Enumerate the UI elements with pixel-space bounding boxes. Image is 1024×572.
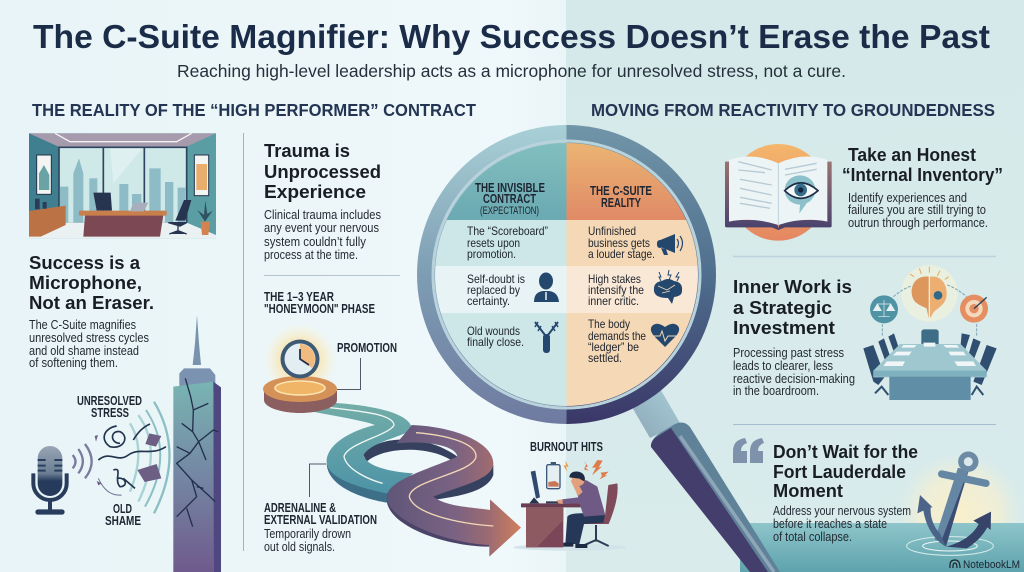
label: old shame: SHAME xyxy=(105,514,141,528)
text: processing past stress: reactive decision-making xyxy=(733,371,855,386)
heading: trauma is unprocessed experience xyxy=(264,140,381,202)
text: c-suite magnifies: of softening them. xyxy=(29,355,118,370)
column head: c-suite reality: REALITY xyxy=(601,196,641,210)
column head: c-suite reality xyxy=(590,184,652,210)
text: temporarily drown: Temporarily drown xyxy=(264,526,351,541)
row text: high stakes xyxy=(588,272,644,308)
logo: notebooklm: NotebookLM xyxy=(963,559,1020,571)
icon: brain with lightning xyxy=(654,270,682,304)
title: The C-Suite Magnifier: Why Success Doesn’t Erase the Past xyxy=(33,19,990,56)
text: c-suite magnifies: The C-Suite magnifies xyxy=(29,317,136,332)
row text: scoreboard xyxy=(467,224,548,261)
table panels in lens xyxy=(435,140,698,409)
row text: high stakes: intensify the xyxy=(588,283,644,297)
handle of magnifier xyxy=(625,380,780,572)
icon: heart with pulse xyxy=(650,324,680,347)
row text: the body: demands the xyxy=(588,329,646,343)
text: c-suite magnifies xyxy=(29,317,149,370)
heading: success is a microphone: Microphone, xyxy=(29,272,142,293)
row text: scoreboard: The “Scoreboard” xyxy=(467,224,548,238)
label: unresolved stress: UNRESOLVED xyxy=(77,394,142,408)
text: clinical trauma: system couldn’t fully xyxy=(264,234,366,249)
text: identify experiences: outrun through performance. xyxy=(848,215,988,230)
label: honeymoon phase xyxy=(264,290,375,316)
heading: success is a microphone: Not an Eraser. xyxy=(29,292,154,313)
heading: trauma is unprocessed experience: Unprocessed xyxy=(264,161,381,182)
label: adrenaline and external validation: ADRENALINE & xyxy=(264,501,336,515)
text: temporarily drown xyxy=(264,526,351,554)
illustration: burnout at desk xyxy=(513,460,627,551)
row text: the body: settled. xyxy=(588,351,622,365)
column head: invisible contract: CONTRACT xyxy=(483,192,536,206)
icon: megaphone xyxy=(657,234,682,255)
connector: adrenaline xyxy=(310,464,326,497)
heading: fort lauderdale moment: Don’t Wait for the xyxy=(773,441,918,462)
text: address your nervous system: Address your nervous system xyxy=(773,503,911,518)
illustration: winding road xyxy=(312,403,521,557)
label: unresolved stress xyxy=(77,394,142,420)
column head: invisible contract xyxy=(475,181,545,217)
text: address your nervous system xyxy=(773,503,911,544)
row text: the body: The body xyxy=(588,317,630,331)
heading: inner work: Inner Work is xyxy=(733,276,852,297)
text: identify experiences xyxy=(848,190,988,230)
heading: fort lauderdale moment xyxy=(773,441,918,501)
text: identify experiences: failures you are still trying to xyxy=(848,202,986,217)
row text: self-doubt xyxy=(467,272,525,308)
magnifying glass comparison xyxy=(417,125,716,424)
illustration: anchor in sea xyxy=(907,454,993,555)
illustration: microphone xyxy=(33,444,92,515)
sea and sun backdrop xyxy=(740,453,1024,572)
text: c-suite magnifies: unresolved stress cycles xyxy=(29,330,149,345)
label: unresolved stress: STRESS xyxy=(91,406,129,420)
label: old shame xyxy=(105,502,141,528)
connector: promotion xyxy=(337,358,360,390)
label: adrenaline and external validation xyxy=(264,501,377,527)
row text: old wounds xyxy=(467,324,524,349)
heading: inner work: a Strategic xyxy=(733,297,832,318)
text: address your nervous system: of total collapse. xyxy=(773,529,852,544)
heading: trauma is unprocessed experience: Trauma is xyxy=(264,140,350,161)
label: burnout hits: BURNOUT HITS xyxy=(530,440,603,454)
text: clinical trauma: process at the time. xyxy=(264,247,358,262)
vertical divider xyxy=(242,133,244,551)
quote mark icon xyxy=(733,438,764,463)
row text: self-doubt: Self-doubt is xyxy=(467,272,525,286)
label: adrenaline and external validation: EXTERNAL VALIDATION xyxy=(264,513,377,527)
row text: old wounds: finally close. xyxy=(467,335,524,349)
illustration: boardroom with brain, scales, target xyxy=(863,265,997,400)
heading: fort lauderdale moment: Fort Lauderdale xyxy=(773,461,906,482)
illustration: executive office xyxy=(29,133,216,238)
row text: scoreboard: promotion. xyxy=(467,247,516,261)
row text: self-doubt: replaced by xyxy=(467,283,520,297)
text: c-suite magnifies: and old shame instead xyxy=(29,343,139,358)
heading: internal inventory: Take an Honest xyxy=(848,144,976,165)
column head: invisible contract: (EXPECTATION) xyxy=(480,205,539,217)
row text: high stakes: High stakes xyxy=(588,272,641,286)
row text: the body: “ledger” be xyxy=(588,340,639,354)
text: processing past stress: leads to clearer, less xyxy=(733,358,833,373)
row text: unfinished business: Unfinished xyxy=(588,224,636,238)
text: processing past stress: in the boardroom. xyxy=(733,383,819,398)
text: address your nervous system: before it reaches a state xyxy=(773,516,887,531)
row text: unfinished business xyxy=(588,224,655,261)
illustration: open book with eye xyxy=(725,144,832,241)
illustration: promotion clock on pedestal xyxy=(263,323,337,413)
column head: invisible contract: THE INVISIBLE xyxy=(475,181,545,195)
illustration: sound waves and scribbles xyxy=(95,402,169,513)
label: old shame: OLD xyxy=(113,502,132,516)
icon: zipper xyxy=(535,322,558,352)
text: clinical trauma: Clinical trauma includes xyxy=(264,207,381,222)
heading: inner work xyxy=(733,276,852,338)
label: promotion: PROMOTION xyxy=(337,341,397,355)
subtitle: Reaching high-level leadership acts as a microphone for unresolved stress, not a cure. xyxy=(177,61,846,81)
heading: internal inventory xyxy=(842,144,1003,185)
illustration: cracked skyscraper xyxy=(173,315,221,572)
column head: c-suite reality: THE C-SUITE xyxy=(590,184,652,198)
text: processing past stress xyxy=(733,345,855,398)
heading: trauma is unprocessed experience: Experience xyxy=(264,181,366,202)
text: processing past stress: Processing past stress xyxy=(733,345,844,360)
row text: old wounds: Old wounds xyxy=(467,324,520,338)
text: identify experiences: Identify experiences and xyxy=(848,190,967,205)
text: clinical trauma: any event your nervous xyxy=(264,220,379,235)
left section heading: THE REALITY OF THE “HIGH PERFORMER” CONTRACT xyxy=(32,100,476,120)
row text: unfinished business: business gets xyxy=(588,236,650,250)
row text: high stakes: inner critic. xyxy=(588,294,639,308)
row text: the body xyxy=(588,317,646,365)
label: honeymoon phase: "HONEYMOON" PHASE xyxy=(264,302,375,316)
heading: inner work: Investment xyxy=(733,317,835,338)
right section heading: MOVING FROM REACTIVITY TO GROUNDEDNESS xyxy=(591,100,995,120)
text: clinical trauma xyxy=(264,207,381,262)
label: honeymoon phase: THE 1–3 YEAR xyxy=(264,290,334,304)
row text: unfinished business: a louder stage. xyxy=(588,247,655,261)
text: temporarily drown: out old signals. xyxy=(264,539,335,554)
heading: internal inventory: “Internal Inventory” xyxy=(842,164,1003,185)
icon: businessperson xyxy=(534,272,559,302)
row text: self-doubt: certainty. xyxy=(467,294,510,308)
row text: scoreboard: resets upon xyxy=(467,236,520,250)
heading: success is a microphone: Success is a xyxy=(29,252,141,273)
heading: fort lauderdale moment: Moment xyxy=(773,480,843,501)
heading: success is a microphone xyxy=(29,252,154,313)
